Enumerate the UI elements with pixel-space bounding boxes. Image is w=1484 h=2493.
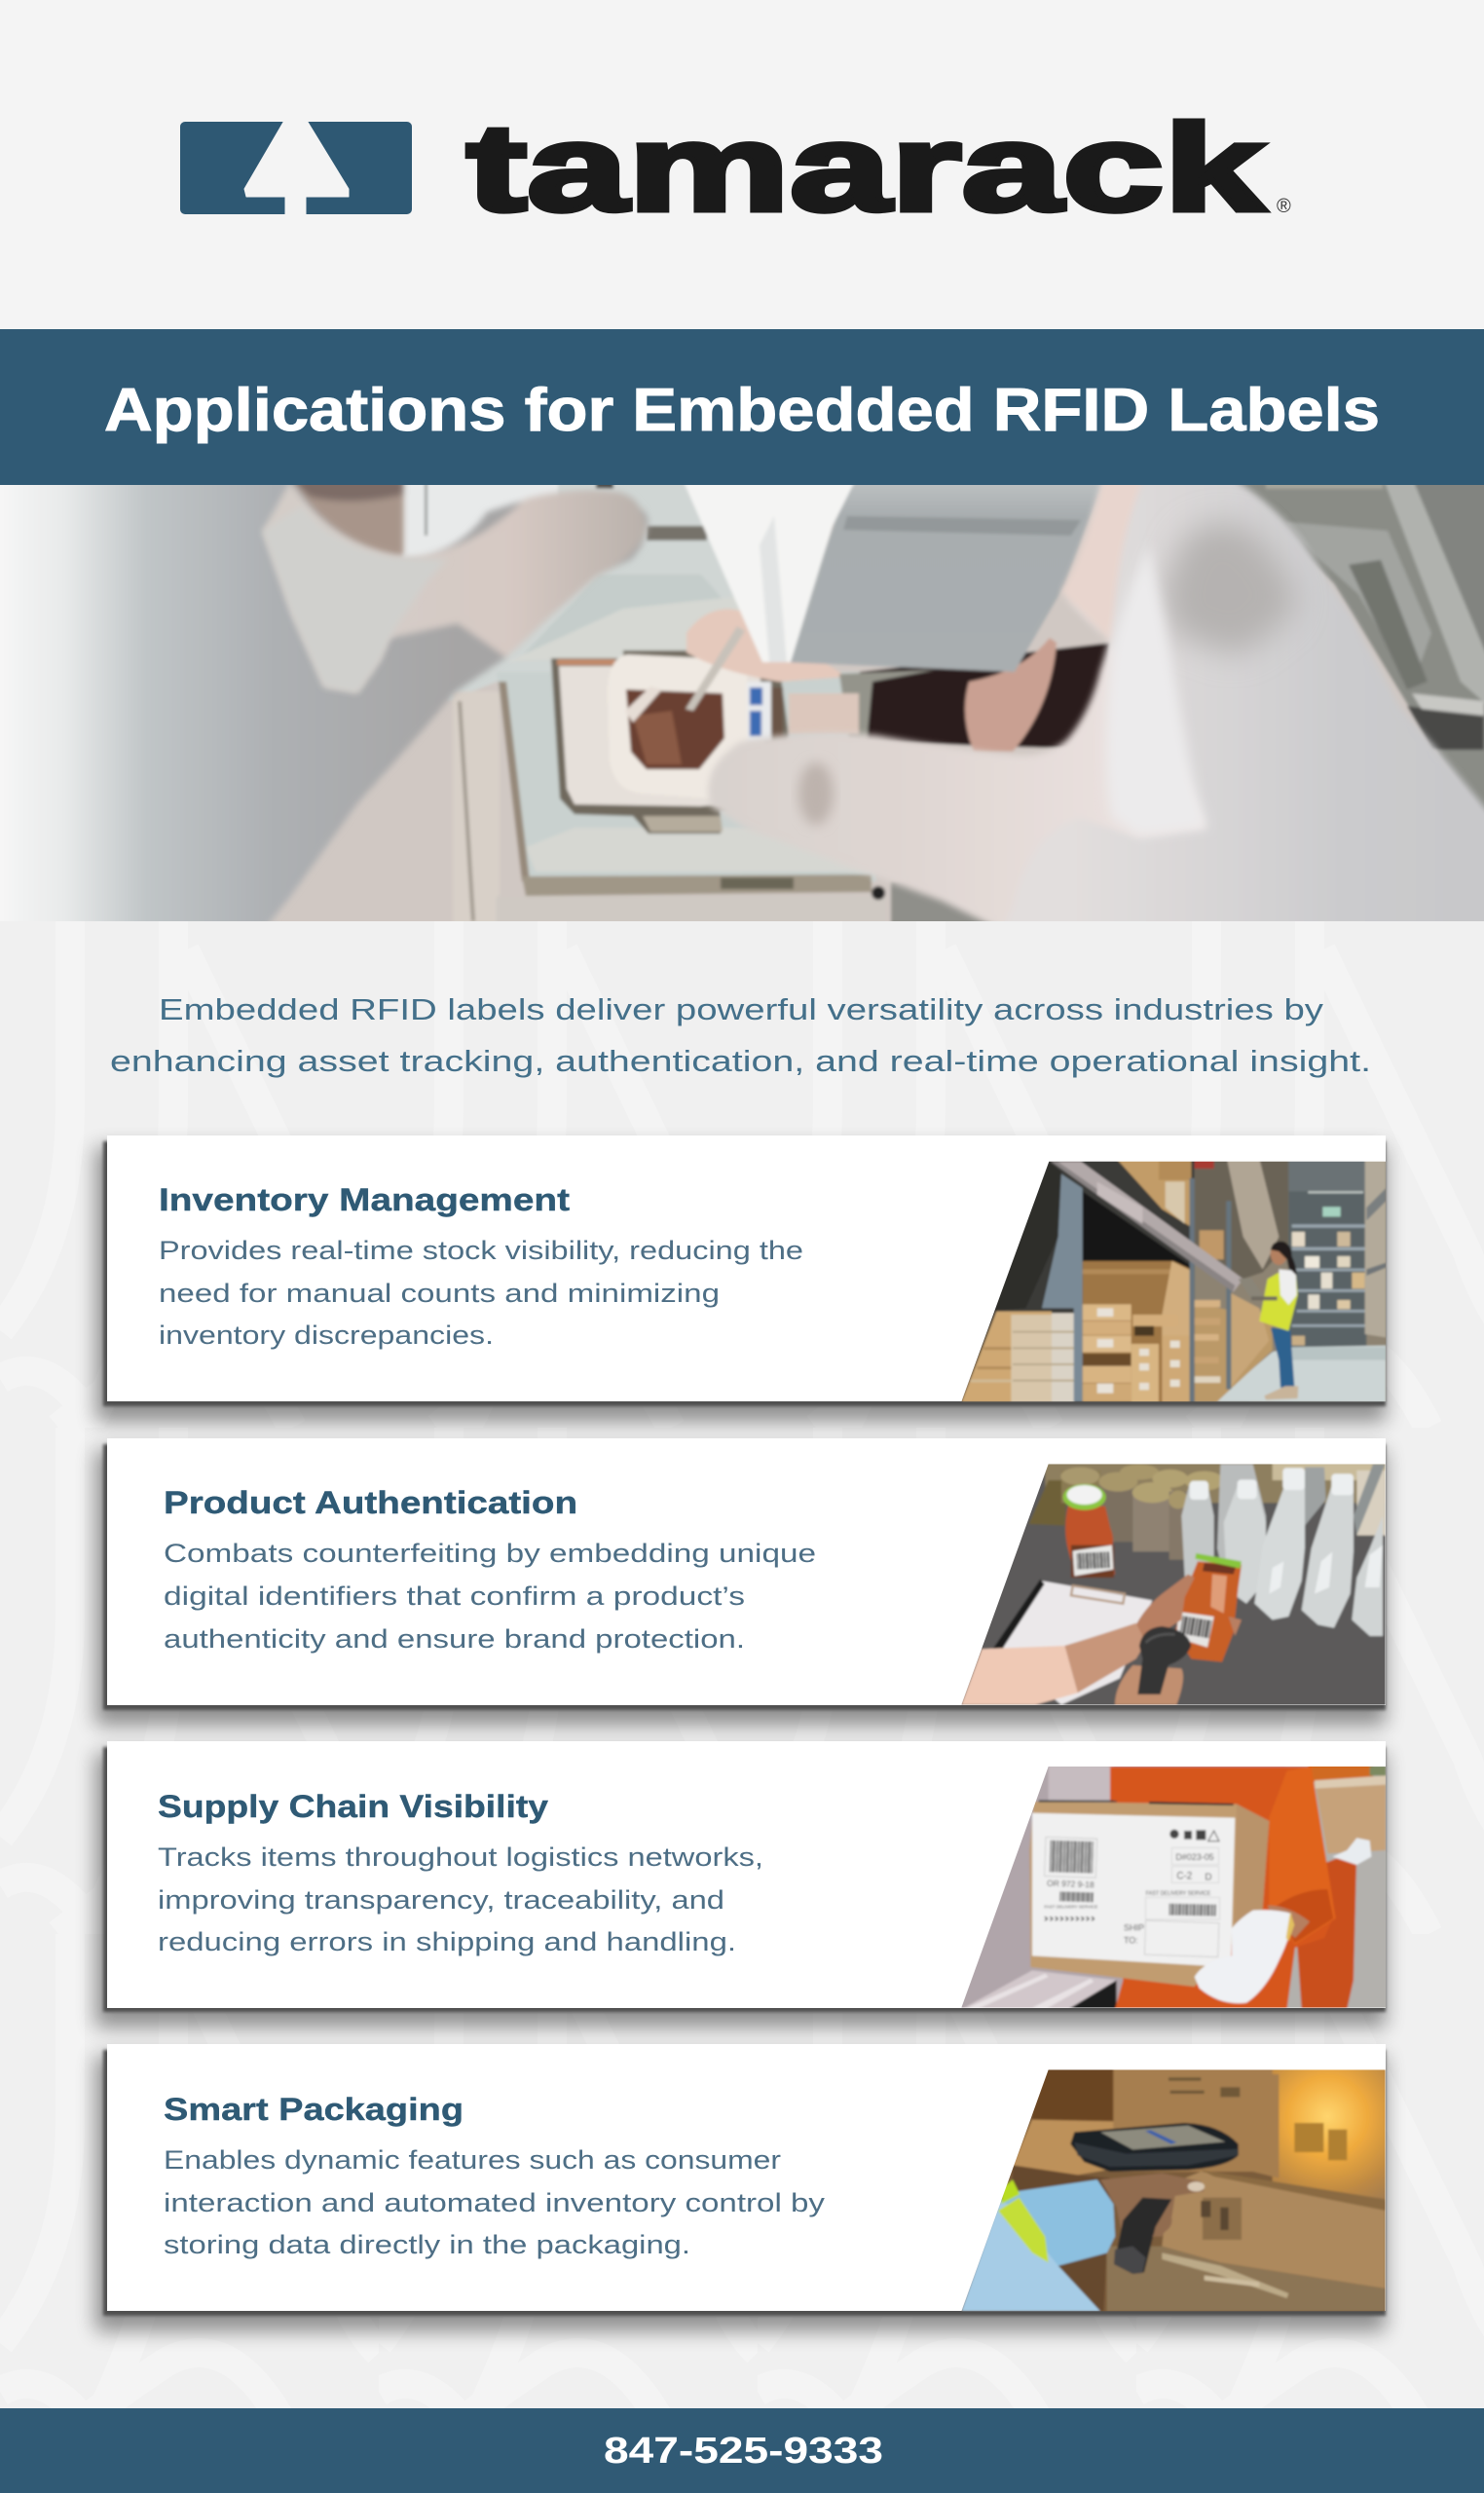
upright posts [1042, 1172, 1083, 1401]
heading: Product Authentication [164, 1485, 577, 1520]
right glove [1003, 485, 1484, 921]
rod [647, 526, 707, 540]
front box stacks [1083, 1304, 1132, 1321]
right shelf face lower boxes [1195, 1302, 1273, 1401]
heading: Inventory Management [159, 1182, 570, 1217]
title banner [0, 329, 1484, 485]
panel: supply chain visibility [95, 1741, 1390, 2028]
logo: tamarack [180, 98, 1291, 237]
heading: Smart Packaging [164, 2092, 464, 2127]
photo: courier holding labelled parcel: D [1205, 1873, 1212, 1883]
footer bar [0, 2408, 1484, 2493]
description: Enables dynamic features such as consumer [164, 2145, 781, 2175]
description: authenticity and ensure brand protection. [164, 1624, 745, 1654]
description: reducing errors in shipping and handling. [158, 1927, 736, 1956]
description: digital identifiers that confirm a product’s [164, 1581, 745, 1611]
title: Applications for Embedded RFID Labels [104, 377, 1380, 444]
scanner [1137, 1626, 1191, 1694]
description [158, 1842, 763, 1956]
photo: courier holding labelled parcel: OR 972 9-18 [1047, 1879, 1094, 1889]
photo: courier holding labelled parcel: ›››››››››› [1044, 1913, 1096, 1924]
skin between glove [290, 477, 403, 556]
photo: warehouse aisle with worker [962, 1161, 1387, 1402]
far left box stack [961, 1312, 1052, 1402]
lower hand [1115, 1665, 1183, 1705]
tweezer wire [686, 626, 745, 711]
wall and plate background [461, 485, 732, 691]
intro text: Embedded RFID labels deliver powerful versatility across industries by [159, 992, 1324, 1026]
bottom shrink-wrapped parcel [1107, 2247, 1386, 2311]
first jar [1065, 1507, 1115, 1578]
photo: courier holding labelled parcel: SHIP [1124, 1923, 1144, 1933]
description: improving transparency, traceability, and [158, 1885, 724, 1915]
photo: barcode scanning of jars [962, 1464, 1386, 1705]
logo wordmark: tamarack [466, 98, 1266, 237]
photo: courier holding labelled parcel: TO: [1124, 1936, 1138, 1946]
far aisle [1287, 1190, 1367, 1348]
photo: courier holding labelled parcel: FAST DELIVERY SERVICE [1146, 1891, 1210, 1897]
chip hole [626, 689, 724, 769]
clipboard [1000, 1581, 1152, 1705]
description: Tracks items throughout logistics networks, [158, 1842, 763, 1872]
description: Provides real-time stock visibility, reducing the [159, 1236, 803, 1265]
dark cavity [860, 643, 1110, 750]
front courier [1110, 1767, 1334, 2009]
description: interaction and automated inventory control by [164, 2188, 826, 2217]
scanner grip [1114, 2198, 1171, 2274]
raised white frame [608, 654, 748, 799]
hand holding jar [1136, 1575, 1195, 1643]
floor [1214, 1346, 1386, 1402]
second jar [1175, 1561, 1242, 1662]
hand [1100, 2174, 1205, 2240]
metal cube [787, 477, 1105, 672]
pink finger behind cube [686, 610, 847, 682]
intro text [110, 992, 1371, 1078]
dark shelf gap [1083, 1192, 1190, 1268]
blue printed strip [746, 682, 771, 742]
parcel [1029, 1802, 1269, 1987]
lower parcel [1162, 2172, 1386, 2288]
photo: courier holding labelled parcel: C-2 [1176, 1870, 1192, 1881]
scanner body [1070, 2123, 1239, 2172]
bottles [1181, 1464, 1386, 1636]
heading: Supply Chain Visibility [158, 1789, 548, 1824]
sleeve [961, 1646, 1078, 1705]
shelf beam [1051, 1162, 1243, 1292]
description: Combats counterfeiting by embedding unique [164, 1539, 816, 1568]
van [961, 1970, 1117, 2009]
icon: logo mark [180, 119, 412, 217]
description: need for manual counts and minimizing [159, 1279, 720, 1308]
metal plate [497, 672, 876, 881]
description [159, 1236, 803, 1350]
label card with metal edge [551, 651, 789, 834]
label details [1045, 1837, 1097, 1878]
description: storing data directly in the packaging. [164, 2230, 690, 2259]
photo: courier holding labelled parcel: FAST DELIVERY SERVICE [1044, 1904, 1097, 1909]
intro text: enhancing asset tracking, authentication, and real-time operational insight. [110, 1044, 1371, 1078]
sleeve [961, 2179, 1115, 2311]
description [164, 1539, 816, 1654]
left glove [0, 477, 649, 931]
photo: courier holding labelled parcel [935, 1760, 1390, 2016]
worker [1271, 1327, 1294, 1388]
glove highlights and shading [263, 506, 1295, 836]
white glove [1195, 1910, 1291, 2003]
hero photo: gloved hands placing an RFID chip [0, 477, 1484, 935]
registered mark: ® [1277, 196, 1291, 217]
cans [1029, 1480, 1068, 1526]
phone number: 847-525-9333 [604, 2431, 883, 2472]
description: inventory discrepancies. [159, 1321, 494, 1350]
panel: inventory management [95, 1135, 1390, 1422]
rear courier [1308, 1763, 1373, 1782]
photo: courier holding labelled parcel: D#023-05 [1175, 1852, 1214, 1862]
photo: handheld scanner reading a parcel [935, 2065, 1390, 2318]
description [164, 2145, 826, 2259]
right background machine [1237, 485, 1484, 811]
panel: product authentication [95, 1438, 1390, 1726]
panel: smart packaging [95, 2044, 1390, 2331]
